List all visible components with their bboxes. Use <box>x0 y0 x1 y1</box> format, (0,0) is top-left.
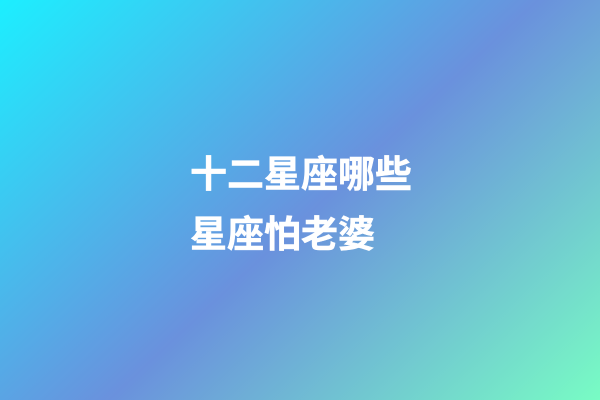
title line 1: 十二星座哪些 <box>190 154 412 195</box>
title line 2: 星座怕老婆 <box>190 214 375 255</box>
